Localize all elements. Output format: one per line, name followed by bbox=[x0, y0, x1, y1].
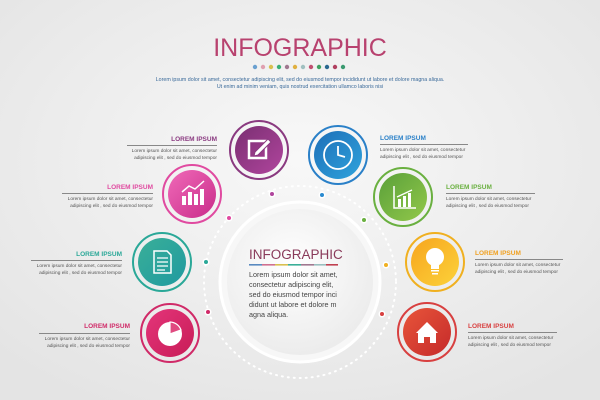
label: pie: Lorem ipsum dolor sit amet, consectetur bbox=[45, 336, 130, 342]
label: growth: Lorem ipsum dolor sit amet, consectetur bbox=[446, 196, 532, 202]
label: document: Lorem ipsum dolor sit amet, consectetur bbox=[37, 263, 122, 269]
label: bulb: Lorem ipsum dolor sit amet, consectetur bbox=[475, 262, 561, 268]
center circle: agna aliqua. bbox=[249, 310, 288, 319]
label: document: adipiscing elit , sed do eiusmod tempor bbox=[39, 270, 122, 276]
icon: document (teal) bbox=[133, 233, 191, 291]
color dots row bbox=[253, 65, 345, 69]
label: clock: adipiscing elit , sed do eiusmod tempor bbox=[380, 154, 463, 160]
subtitle: Ut enim ad minim veniam, quis nostrud exercitation ullamco laboris nisi bbox=[217, 84, 383, 90]
label: edit: LOREM IPSUM bbox=[171, 136, 217, 143]
center circle: Lorem ipsum dolor sit amet, bbox=[249, 270, 338, 279]
label: growth: adipiscing elit , sed do eiusmod tempor bbox=[446, 203, 529, 209]
label: edit: Lorem ipsum dolor sit amet, consectetur bbox=[132, 148, 217, 154]
dotted arc bbox=[204, 186, 396, 378]
label: clock bbox=[380, 135, 468, 160]
label: bulb: adipiscing elit , sed do eiusmod tempor bbox=[475, 269, 558, 275]
label: bulb bbox=[475, 250, 563, 275]
icon: clock (blue) bbox=[309, 126, 367, 184]
label: document: LOREM IPSUM bbox=[76, 251, 122, 258]
center circle: consectetur adipiscing elit, bbox=[249, 280, 333, 289]
icon: pie (crimson) bbox=[141, 304, 199, 362]
label: chart: Lorem ipsum dolor sit amet, consectetur bbox=[68, 196, 153, 202]
label: pie: LOREM IPSUM bbox=[84, 323, 130, 330]
icon: growth chart (green) bbox=[374, 168, 432, 226]
label: growth: LOREM IPSUM bbox=[446, 184, 492, 191]
label: bulb: LOREM IPSUM bbox=[475, 250, 521, 257]
label: edit bbox=[127, 136, 217, 161]
subtitle: Lorem ipsum dolor sit amet, consectetur adipiscing elit, sed do eiusmod tempor incididunt ut labore et dolore magna aliqua. bbox=[156, 77, 444, 83]
label: growth bbox=[446, 184, 535, 209]
icon: home (red-orange) bbox=[398, 303, 456, 361]
label: clock: Lorem ipsum dolor sit amet, consectetur bbox=[380, 147, 466, 153]
label: pie: adipiscing elit , sed do eiusmod tempor bbox=[47, 343, 130, 349]
small arc dots bbox=[202, 190, 390, 318]
icon: bar chart (pink) bbox=[163, 165, 221, 223]
icon: edit (purple) bbox=[230, 121, 288, 179]
center circle: INFOGRAPHIC bbox=[249, 247, 343, 262]
label: chart bbox=[62, 184, 153, 209]
subtitle bbox=[156, 77, 444, 90]
label: home: adipiscing elit , sed do eiusmod tempor bbox=[468, 342, 551, 348]
label: home: LOREM IPSUM bbox=[468, 323, 514, 330]
label: edit: adipiscing elit , sed do eiusmod tempor bbox=[134, 155, 217, 161]
title: INFOGRAPHIC bbox=[213, 34, 387, 62]
label: home: Lorem ipsum dolor sit amet, consectetur bbox=[468, 335, 554, 341]
icon: bulb (yellow) bbox=[406, 233, 464, 291]
label: chart: LOREM IPSUM bbox=[107, 184, 153, 191]
label: clock: LOREM IPSUM bbox=[380, 135, 426, 142]
label: home bbox=[468, 323, 557, 348]
center circle: sed do eiusmod tempor inci bbox=[249, 290, 337, 299]
label: document bbox=[31, 251, 122, 276]
label: pie bbox=[39, 323, 130, 349]
center circle: didunt ut labore et dolore m bbox=[249, 300, 337, 309]
label: chart: adipiscing elit , sed do eiusmod tempor bbox=[70, 203, 153, 209]
center circle bbox=[220, 202, 380, 362]
